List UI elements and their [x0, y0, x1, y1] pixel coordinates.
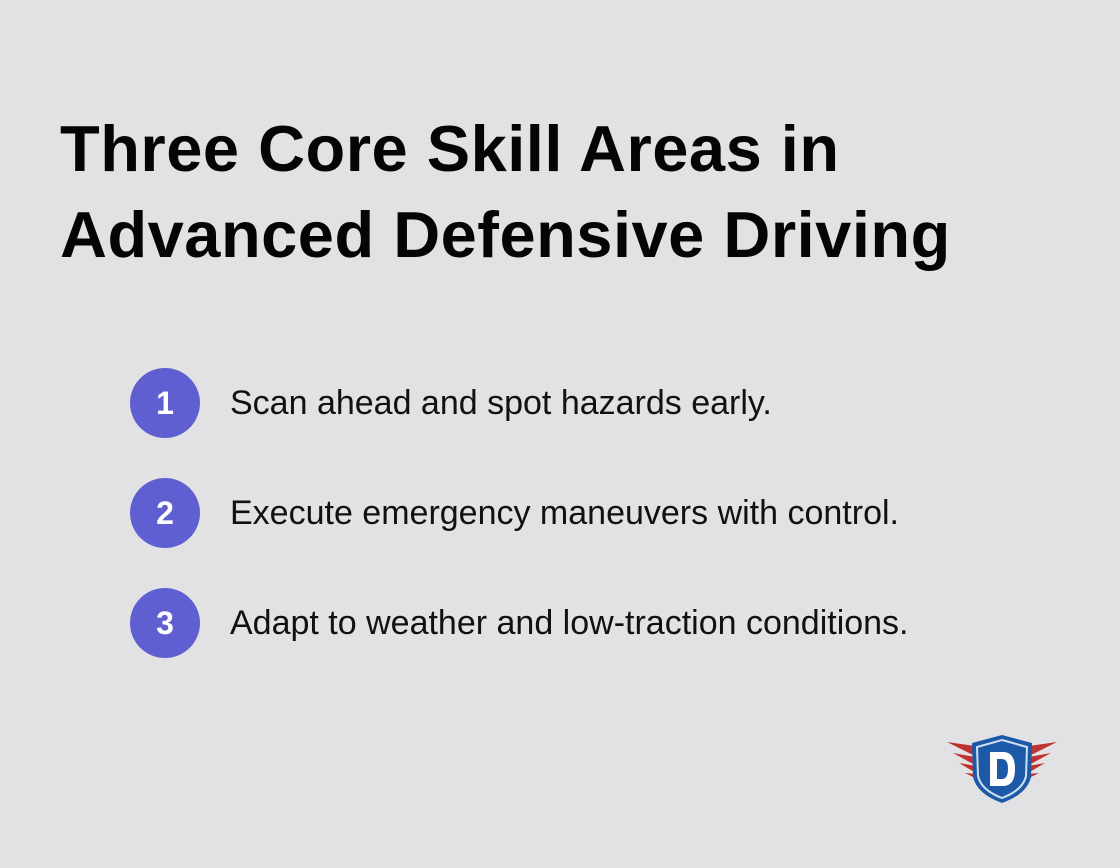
item 1 — [130, 368, 772, 438]
number badge 3 — [130, 588, 200, 658]
title — [60, 112, 951, 271]
number badge 1 — [130, 368, 200, 438]
item 3 — [130, 588, 909, 658]
number badge 1: 1 — [156, 385, 174, 421]
title: Three Core Skill Areas in — [60, 112, 840, 185]
text 3: Adapt to weather and low-traction conditions. — [230, 604, 909, 642]
number badge 3: 3 — [156, 605, 174, 641]
text 2: Execute emergency maneuvers with control. — [230, 494, 899, 532]
item 2 — [130, 478, 899, 548]
number badge 2: 2 — [156, 495, 174, 531]
number badge 2 — [130, 478, 200, 548]
logo — [947, 735, 1057, 803]
title: Advanced Defensive Driving — [60, 198, 951, 271]
text 1: Scan ahead and spot hazards early. — [230, 384, 772, 422]
